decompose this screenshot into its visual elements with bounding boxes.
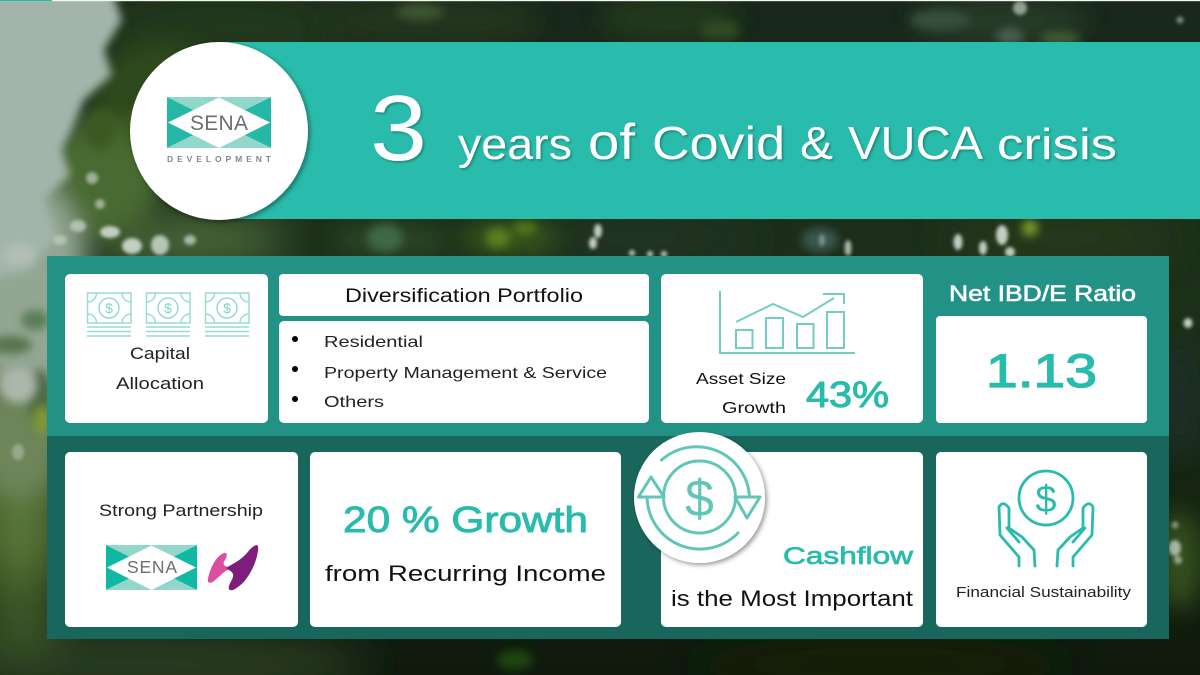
pale wall behind the tree (0, 0, 122, 280)
logo circle: SENA Development: DEVELOPMENT (167, 154, 272, 164)
card: capital allocation (65, 274, 268, 423)
header banner (219, 42, 1200, 219)
label: capital allocation: Capital (130, 344, 190, 363)
logo: SENA (106, 545, 197, 590)
card: strong partnership (65, 452, 298, 627)
card: portfolio list (279, 321, 649, 423)
list items (324, 334, 607, 411)
title: 3 years of Covid & VUCA crisis: years (458, 120, 572, 169)
card: diversification portfolio heading (279, 274, 649, 316)
logo circle: SENA Development: SENA (190, 112, 248, 135)
list items: Others (324, 394, 384, 411)
icon: three banknotes (87, 293, 249, 336)
title: 3 years of Covid & VUCA crisis: & (800, 117, 833, 169)
title: 3 years of Covid & VUCA crisis: crisis (997, 120, 1117, 169)
list items: Residential (324, 334, 423, 351)
card: strong partnership: Strong Partnership (99, 501, 263, 520)
title: 3 years of Covid & VUCA crisis (370, 76, 1117, 180)
main panel upper band (47, 256, 1169, 436)
list items: Property Management & Service (324, 365, 607, 382)
dollar signs on banknotes (105, 300, 231, 316)
label: asset size growth: Asset Size (696, 371, 786, 388)
title: 3 years of Covid & VUCA crisis: 3 (370, 76, 427, 180)
card: asset size growth (661, 274, 923, 423)
card: ratio value (936, 316, 1147, 423)
dollar signs on banknotes: $ (105, 300, 113, 316)
icon: cashflow cycle (634, 432, 765, 563)
logo: SENA: SENA (127, 557, 177, 577)
card: ratio value: 1.13 (986, 344, 1097, 397)
dollar signs on banknotes: $ (223, 300, 231, 316)
label: capital allocation (116, 344, 204, 393)
label: capital allocation: Allocation (116, 374, 204, 393)
card: cashflow (661, 452, 923, 627)
card: financial sustainability (936, 452, 1147, 627)
icon: hands holding coin: $ (1035, 479, 1057, 521)
card: cashflow: Cashflow (783, 543, 914, 570)
card: recurring income growth (310, 452, 621, 627)
label: asset size growth (696, 371, 786, 417)
logo circle: SENA Development (130, 42, 308, 220)
label: asset size growth: Growth (722, 400, 786, 417)
card: recurring income growth: from Recurring Income (325, 561, 606, 586)
main panel lower band (47, 436, 1169, 639)
value: 43%: 43% (806, 374, 889, 415)
top edge strip (0, 0, 1200, 1)
label: financial sustainability: Financial Sustainability (956, 584, 1132, 601)
title: 3 years of Covid & VUCA crisis: Covid (652, 117, 785, 169)
title: 3 years of Covid & VUCA crisis: VUCA (848, 117, 983, 169)
icon: growth chart (720, 291, 855, 353)
heading: net IBD/E ratio: Net IBD/E Ratio (949, 281, 1136, 306)
dollar signs on banknotes: $ (164, 300, 172, 316)
icon: cashflow cycle: $ (685, 470, 714, 528)
title: 3 years of Covid & VUCA crisis: of (588, 114, 635, 170)
card: cashflow: is the Most Important (671, 586, 913, 611)
logo: partner mark (208, 545, 258, 590)
icon: hands holding coin (999, 471, 1093, 566)
list bullets (292, 336, 298, 402)
card: recurring income growth: 20 % Growth (343, 499, 588, 540)
card: diversification portfolio heading: Diversification Portfolio (345, 286, 583, 307)
